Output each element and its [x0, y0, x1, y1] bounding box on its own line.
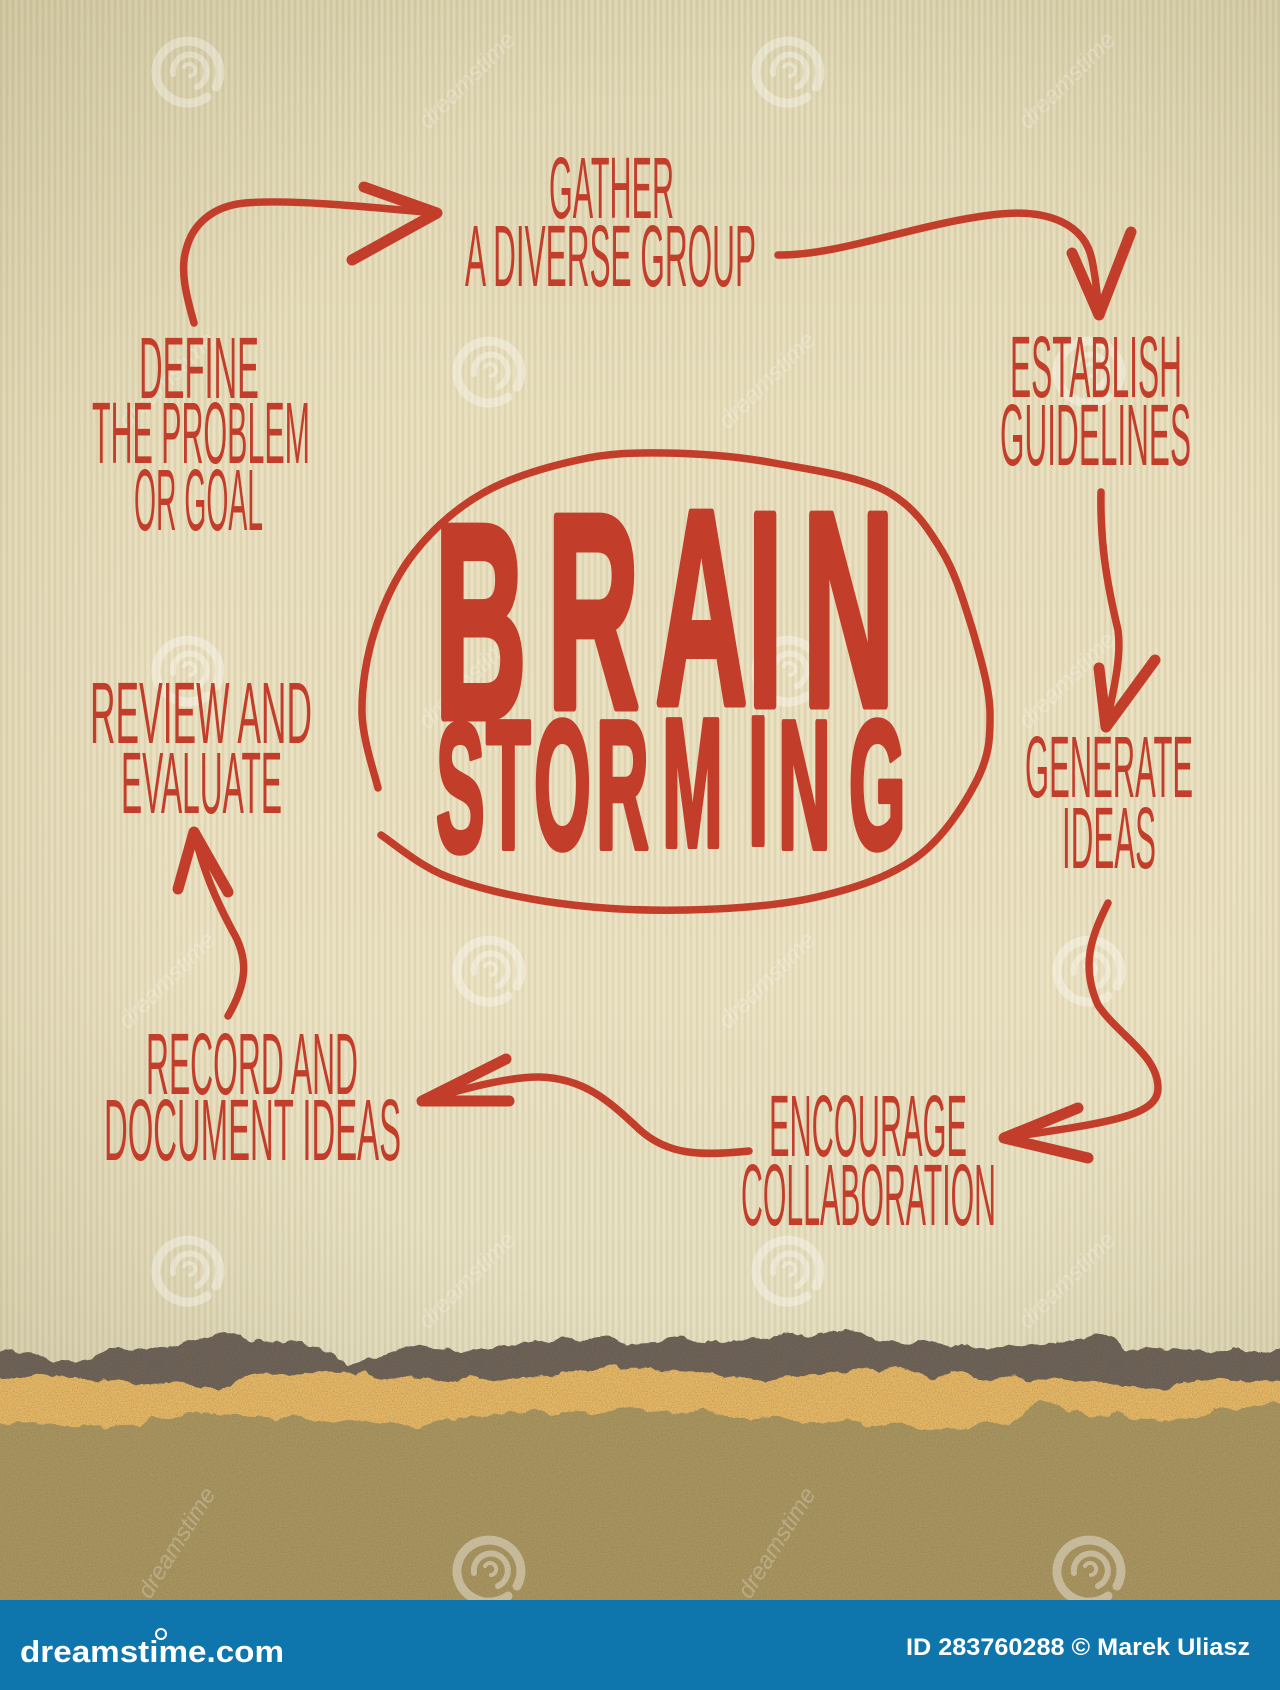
text: EVALUATE	[121, 735, 282, 832]
step: define the problem or goal	[92, 320, 310, 549]
watermark text: dreamstime	[713, 926, 821, 1034]
title: BRAIN: BRAIN	[435, 454, 894, 776]
watermark text: dreamstime	[1013, 26, 1121, 134]
bottom watermark text: dreamstime	[732, 1483, 822, 1603]
step: establish guidelines	[1000, 319, 1191, 484]
text: RECORD AND	[146, 1016, 358, 1113]
arrow: record to review	[178, 832, 244, 1016]
step: record and document ideas	[104, 1016, 401, 1179]
arrow: define to gather	[184, 187, 437, 323]
text: REVIEW AND	[90, 665, 312, 762]
text: DOCUMENT IDEAS	[104, 1082, 401, 1179]
watermark text: dreamstime	[113, 326, 221, 434]
central ring around title	[362, 453, 990, 910]
arrow: generate to encourage	[1004, 903, 1158, 1158]
bottom watermark text	[132, 1483, 822, 1603]
bottom watermark spirals	[457, 1540, 1121, 1602]
footer logo: dreamstime.com	[20, 1634, 284, 1669]
text: A DIVERSE GROUP	[465, 208, 756, 305]
bottom watermark text: dreamstime	[132, 1483, 222, 1603]
step: encourage collaboration	[741, 1078, 996, 1244]
title: STORMING: STORMING	[436, 679, 906, 890]
torn paper: orange layer	[0, 1368, 1280, 1440]
arrow: establish to generate	[1099, 492, 1155, 727]
watermark text: dreamstime	[713, 326, 821, 434]
step: define the problem or goal: DEFINE	[139, 320, 259, 417]
watermark text: dreamstime	[413, 626, 521, 734]
text: OR GOAL	[134, 452, 263, 549]
arrow: gather to establish	[778, 213, 1131, 315]
watermark text: dreamstime	[413, 1226, 521, 1334]
torn paper: olive brown layer	[0, 1402, 1280, 1640]
watermark text	[113, 26, 1121, 1334]
arrow: encourage to record	[422, 1059, 749, 1153]
footer band	[0, 1600, 1280, 1690]
text: THE PROBLEM	[92, 385, 310, 482]
step: gather a diverse group: GATHER	[549, 140, 674, 237]
footer image id and credit: ID 283760288 © Marek Uliasz	[906, 1634, 1250, 1661]
torn paper: dark grey layer	[0, 1333, 1280, 1420]
watermark text: dreamstime	[413, 26, 521, 134]
step: generate ideas	[1025, 719, 1193, 887]
watermark text: dreamstime	[113, 926, 221, 1034]
watermark spirals	[156, 41, 1121, 1302]
step: gather a diverse group	[465, 140, 756, 305]
step: review and evaluate	[90, 665, 312, 832]
watermark text: dreamstime	[1013, 626, 1121, 734]
watermark text: dreamstime	[1013, 1226, 1121, 1334]
